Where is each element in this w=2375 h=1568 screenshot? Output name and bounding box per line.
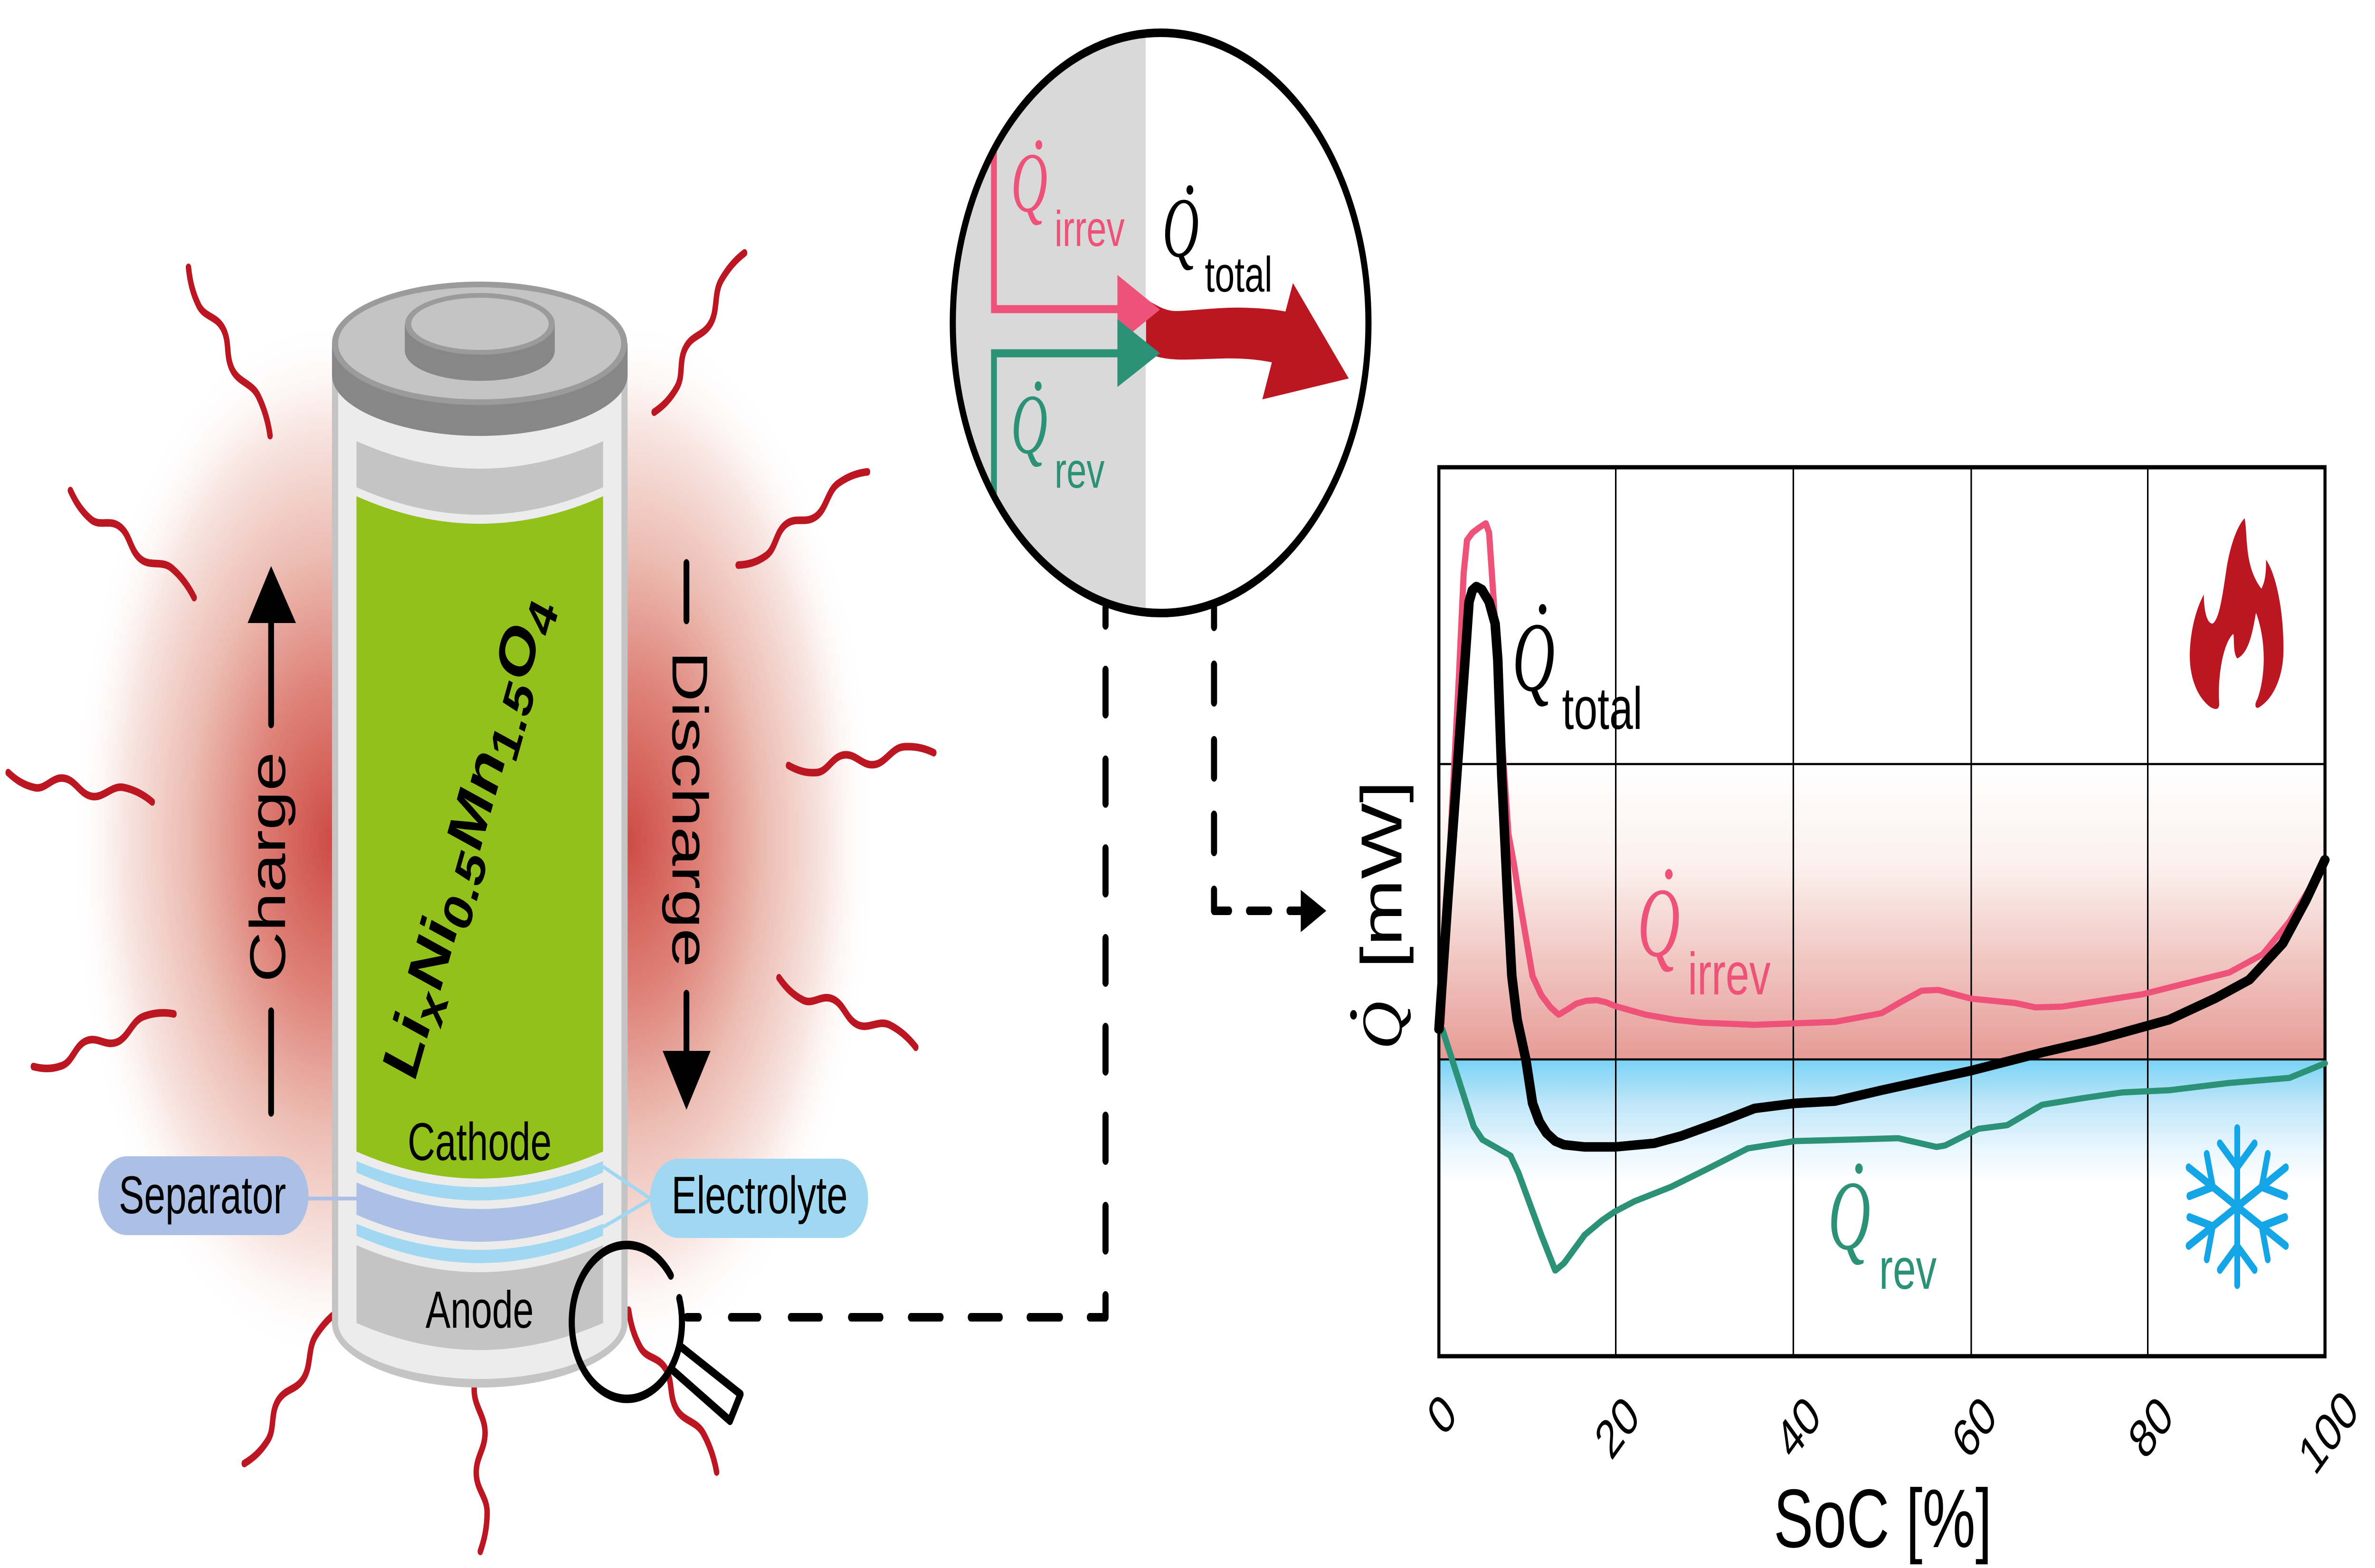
cathode formula: Ni — [396, 906, 468, 1001]
callout: electrolyte: Electrolyte — [672, 1166, 848, 1225]
label: Q total: Q — [1162, 181, 1199, 275]
label: chart Q rev — [1828, 1161, 1937, 1301]
arrow: irreversible heat — [991, 151, 1160, 331]
cathode formula: 0.5 — [434, 842, 496, 939]
arrow: reversible heat — [991, 319, 1160, 495]
arrow: total heat — [1146, 283, 1349, 399]
arrow: discharge: Discharge — [662, 651, 718, 967]
y axis label: Q — [1350, 1001, 1414, 1049]
icon: snowflake — [2180, 1128, 2295, 1285]
endothermic gradient band — [1439, 1059, 2325, 1182]
label: chart Q irrev: irrev — [1688, 941, 1770, 1008]
x axis label: SoC [%] — [1774, 1472, 1992, 1565]
arrow: charge: Charge — [240, 752, 296, 982]
label: Q total — [1162, 181, 1273, 302]
x axis tick labels — [1419, 1379, 2366, 1485]
callout: electrolyte — [603, 1159, 868, 1238]
heat waves around the cell — [7, 247, 934, 1551]
electrolyte layer lower — [357, 1224, 603, 1263]
arrow: charge — [240, 566, 296, 1113]
label: Q rev: Q — [1011, 378, 1047, 472]
label: Q rev — [1011, 378, 1104, 499]
zoom circle outline — [953, 33, 1368, 613]
x axis tick labels: 20 — [1586, 1385, 1648, 1470]
label: chart Q total: Q — [1512, 603, 1555, 712]
cathode formula: Li — [371, 1001, 441, 1089]
cathode formula: 4 — [517, 592, 567, 644]
label: Q irrev: irrev — [1054, 201, 1125, 257]
callout: separator: Separator — [119, 1165, 286, 1225]
icon: flame — [2190, 518, 2283, 709]
battery terminal — [405, 293, 555, 381]
separator layer — [357, 1182, 603, 1242]
arrow: discharge — [662, 563, 718, 1110]
label: Q irrev — [1011, 136, 1125, 257]
cathode formula: 1.5 — [481, 672, 544, 769]
current collector top — [357, 441, 603, 515]
label: chart Q total — [1512, 603, 1643, 742]
dashed connector: magnifier to zoom circle — [687, 608, 1105, 1317]
label: chart Q rev: rev — [1879, 1237, 1937, 1301]
x axis tick labels: 60 — [1944, 1385, 2005, 1470]
heat glow left — [70, 318, 594, 1363]
curve: Q rev — [1442, 1029, 2325, 1270]
y axis label — [1349, 780, 1414, 1049]
x axis tick labels: 0 — [1419, 1383, 1465, 1447]
label: chart Q irrev — [1637, 868, 1770, 1008]
label: cathode: Cathode — [408, 1112, 551, 1171]
curves — [1439, 523, 2325, 1270]
x axis tick labels: 80 — [2120, 1385, 2182, 1470]
y axis label: [mW] — [1349, 780, 1414, 969]
cathode layer — [357, 496, 603, 1179]
icon: magnifying glass — [572, 1245, 741, 1421]
panel: heat flow chart — [1349, 467, 2366, 1565]
cathode formula: O — [484, 611, 551, 691]
battery cap — [332, 282, 627, 436]
panel: battery cell with heat — [7, 247, 934, 1551]
callout: separator — [98, 1156, 357, 1235]
curve: Q total — [1439, 586, 2325, 1147]
label: chart Q total: total — [1562, 676, 1643, 742]
curve: Q irrev — [1442, 523, 2325, 1025]
label: chart Q irrev: Q — [1637, 868, 1680, 978]
label: chart Q rev: Q — [1828, 1161, 1871, 1271]
dashed arrow: zoom circle to chart — [1214, 608, 1326, 932]
label: Q rev: rev — [1054, 443, 1104, 499]
chart frame — [1439, 467, 2325, 1356]
exothermic gradient band — [1439, 764, 2325, 1059]
cathode formula: x — [407, 982, 457, 1035]
heat glow right — [379, 318, 876, 1363]
cathode formula: Mn — [436, 736, 516, 861]
anode layer — [357, 1245, 603, 1350]
x axis tick labels: 100 — [2290, 1379, 2366, 1485]
battery casing — [332, 361, 627, 1388]
panel: zoom circle heat flows — [949, 24, 1368, 622]
label: Q irrev: Q — [1011, 136, 1047, 230]
label: anode: Anode — [426, 1281, 534, 1339]
cell side shading — [949, 24, 1146, 622]
label: Q total: total — [1205, 247, 1273, 302]
x axis tick labels: 40 — [1768, 1385, 1829, 1470]
electrolyte layer upper — [357, 1161, 603, 1200]
